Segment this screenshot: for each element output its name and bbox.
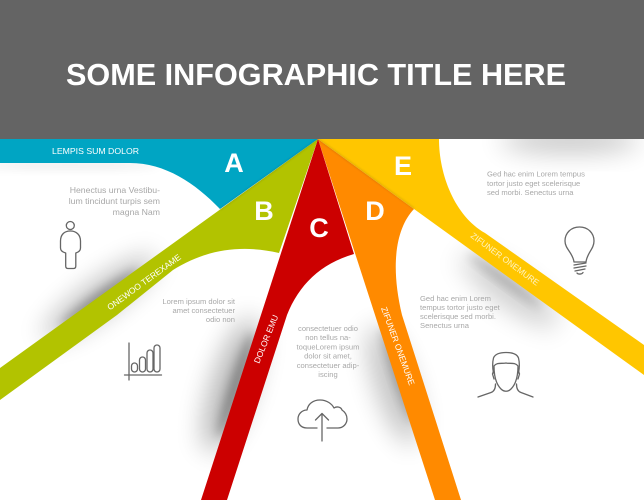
header bar <box>0 0 644 139</box>
text block C: non tellus na- <box>305 333 351 342</box>
text block A <box>69 185 160 217</box>
text block D: tempus tortor justo eget <box>420 303 501 312</box>
band label D: ZIFUNER ONEMURE <box>379 305 417 387</box>
text block A: magna Nam <box>113 207 160 217</box>
text block B: amet consectetuer <box>173 306 235 315</box>
text block E <box>487 170 585 197</box>
icon: person <box>60 222 80 268</box>
letter B: B <box>254 196 274 226</box>
band C: red <box>201 139 354 500</box>
icon: bar chart <box>124 343 162 380</box>
text block D: scelerisque sed morbi. <box>420 312 496 321</box>
text block B: Lorem ipsum dolor sit <box>162 297 236 306</box>
text block C: iscing <box>318 370 338 379</box>
letter D: D <box>365 196 385 226</box>
band edge shading <box>220 139 414 210</box>
icon: man head <box>478 352 533 397</box>
text block B <box>162 297 236 324</box>
text block C: consectetuer adip- <box>297 361 360 370</box>
text block D: Senectus urna <box>420 321 470 330</box>
text block D: Ged hac enim Lorem <box>420 294 491 303</box>
text block A: lum tincidunt turpis sem <box>69 196 160 206</box>
band label A: LEMPIS SUM DOLOR <box>52 146 139 156</box>
text block B: odio non <box>206 315 235 324</box>
text block E: tortor justo eget scelerisque <box>487 179 580 188</box>
band A: teal <box>0 139 318 209</box>
band label B: ONEWOO TEREXAME <box>105 252 183 312</box>
text block C: toqueLorem ipsum <box>297 342 359 352</box>
icon: light bulb <box>565 227 594 274</box>
text block D <box>420 294 501 330</box>
shadows behind bands <box>0 128 640 458</box>
text block E: Ged hac enim Lorem tempus <box>487 170 585 178</box>
letter C: C <box>309 213 329 243</box>
icon: cloud upload <box>298 400 347 441</box>
letter A: A <box>224 148 244 178</box>
band E: yellow <box>318 139 644 375</box>
band B: olive <box>0 139 318 400</box>
band D: orange <box>318 139 461 500</box>
text block A: Henectus urna Vestibu- <box>70 185 160 195</box>
text block C: consectetuer odio <box>298 324 358 333</box>
text block E: sed morbi. Senectus urna <box>487 188 574 197</box>
text block C: dolor sit amet, <box>304 352 352 360</box>
letter E: E <box>394 151 412 181</box>
band label C: DOLOR EMU <box>252 313 280 365</box>
text block C <box>297 324 360 379</box>
title: SOME INFOGRAPHIC TITLE HERE <box>66 57 566 92</box>
band label E: ZIFUNER ONEMURE <box>469 230 541 288</box>
